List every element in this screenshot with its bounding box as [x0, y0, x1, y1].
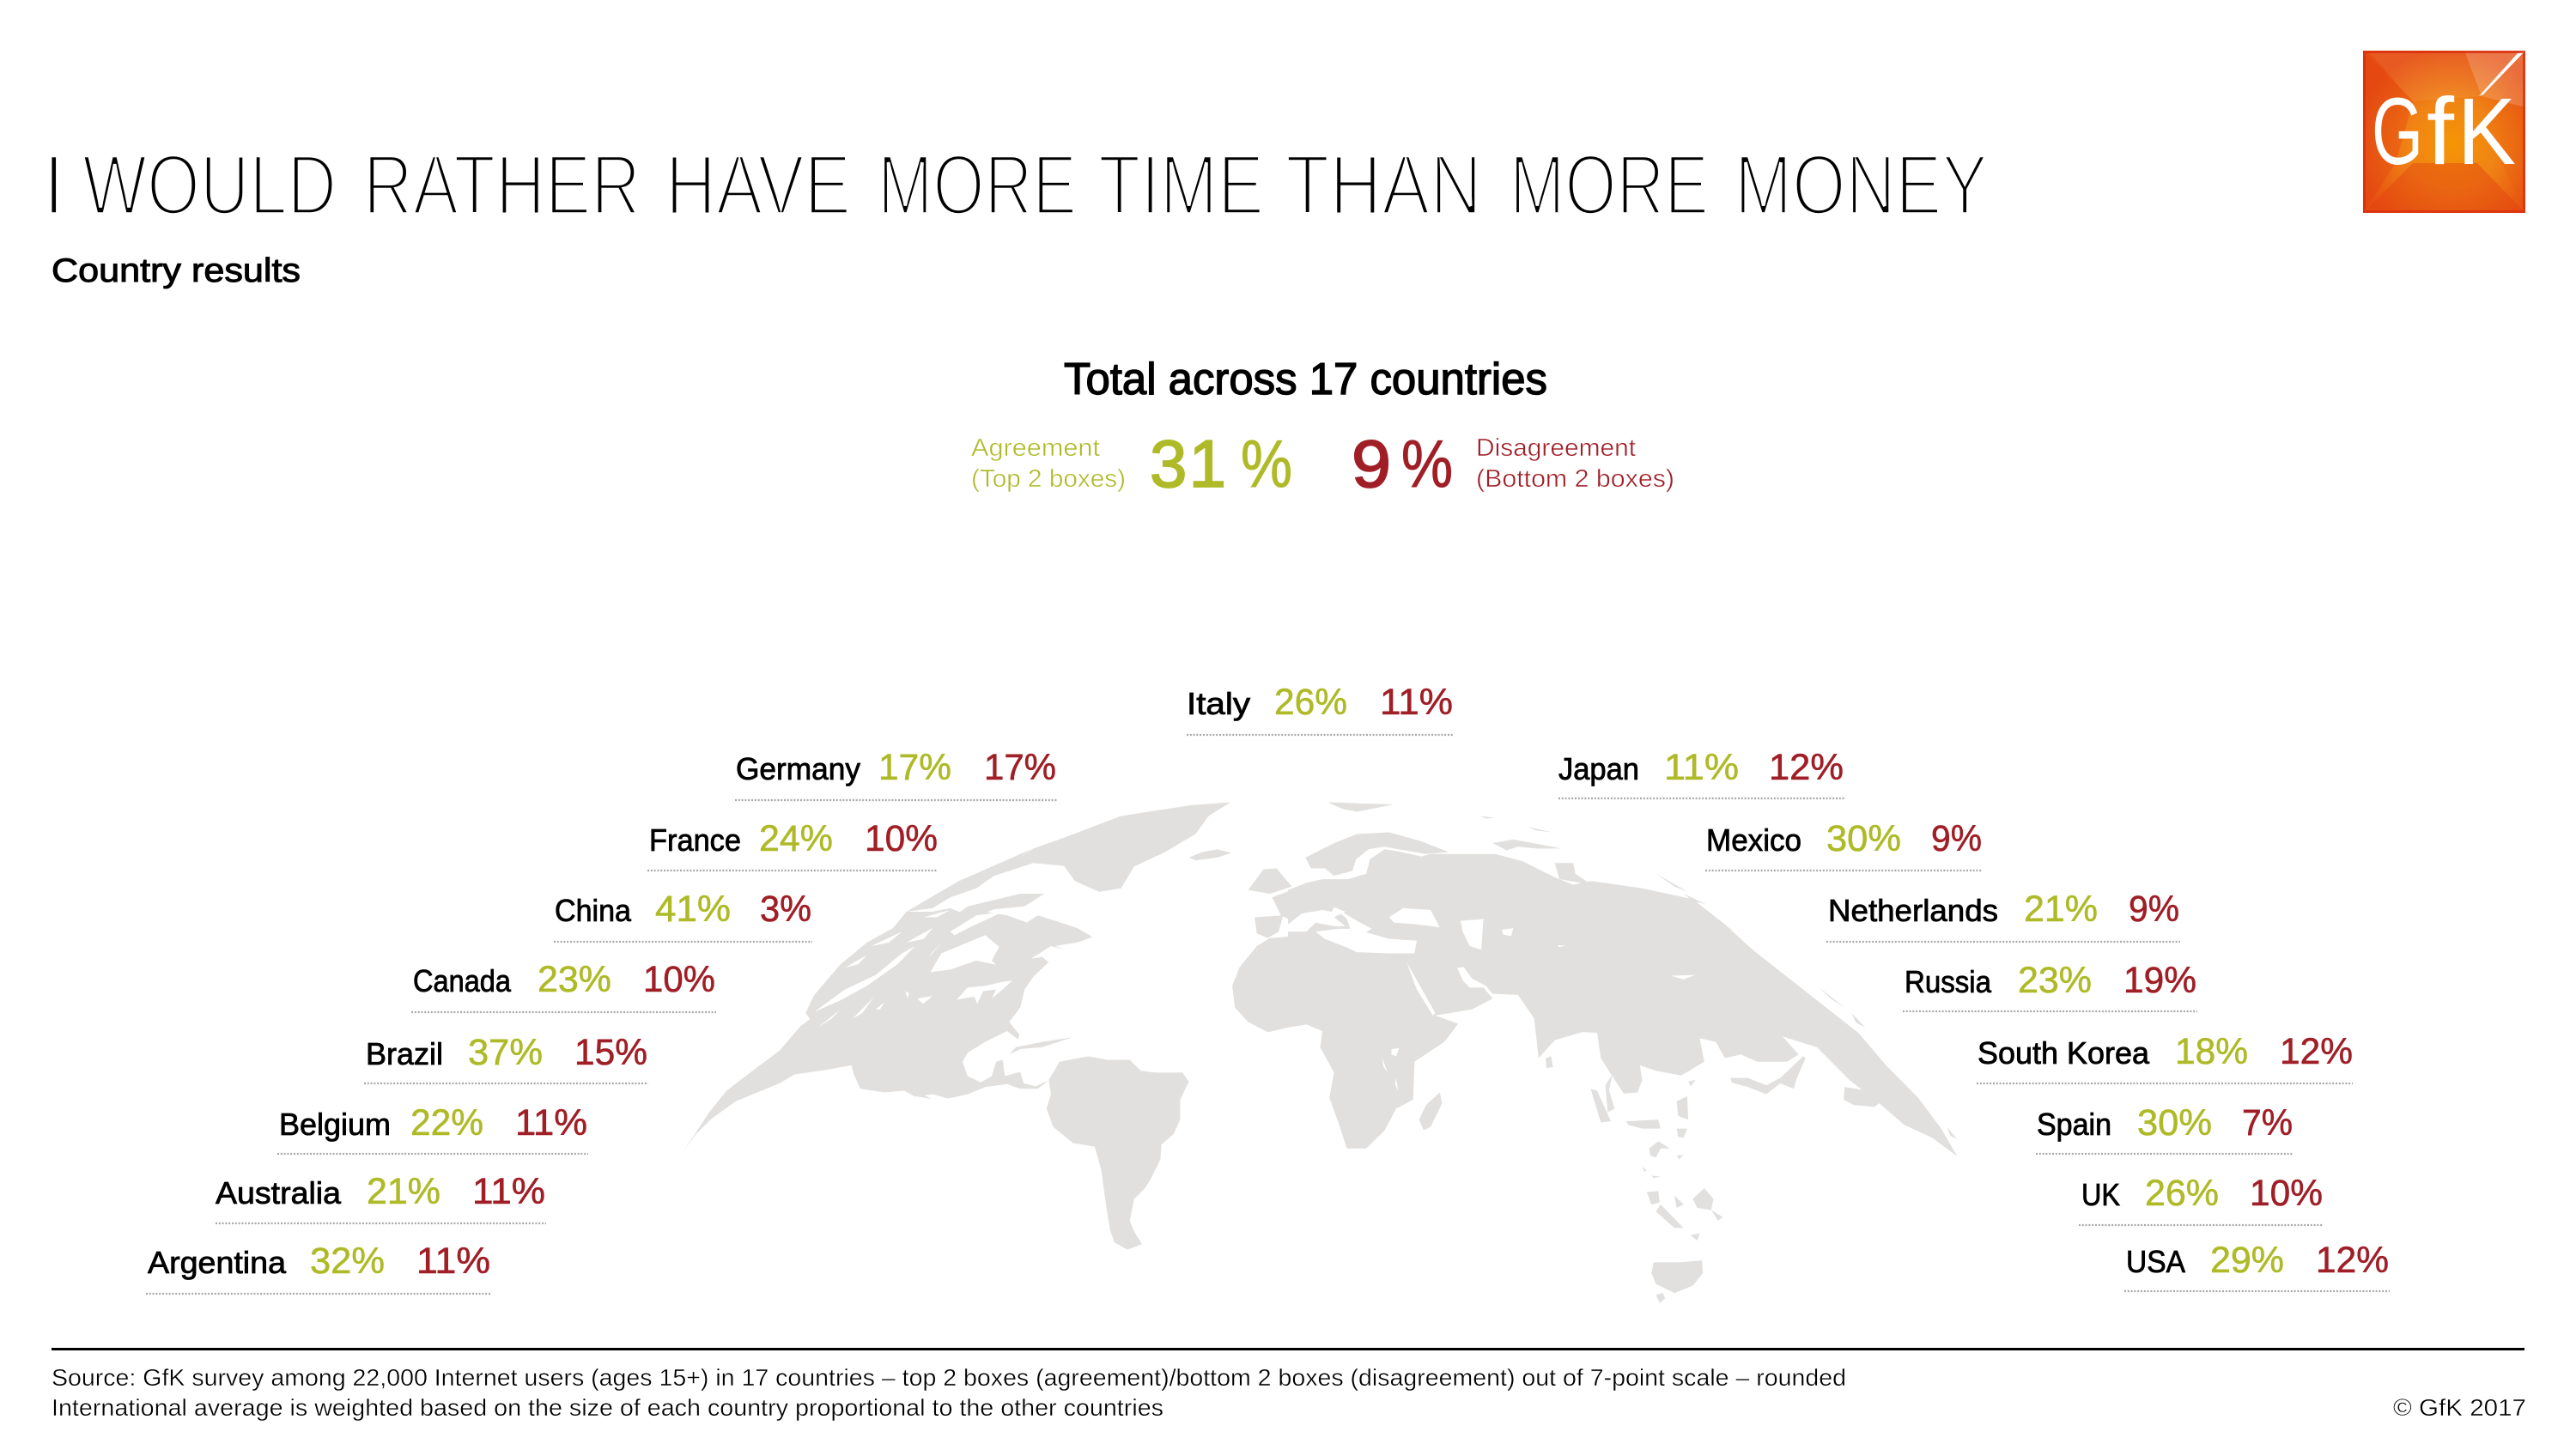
- title: TIME: [1098, 137, 1264, 232]
- row: USA: USA: [2126, 1244, 2185, 1279]
- row: Australia: 21%: [367, 1171, 440, 1212]
- row: Netherlands: 21%: [2024, 889, 2098, 930]
- title: MONEY: [1735, 137, 1988, 232]
- source note: [52, 1364, 1846, 1421]
- row: Russia: Russia: [1905, 964, 1992, 999]
- row: France: 10%: [865, 818, 938, 859]
- row: UK: 10%: [2250, 1173, 2323, 1214]
- row: UK: UK: [2081, 1177, 2120, 1212]
- row: Mexico: [1705, 818, 1983, 871]
- row: Netherlands: [1826, 889, 2180, 942]
- row: Brazil: 37%: [468, 1032, 543, 1073]
- row: UK: 26%: [2145, 1173, 2219, 1214]
- row: Italy: [1187, 682, 1453, 735]
- row: Germany: 17%: [878, 747, 951, 788]
- legend: agreement total: (Top 2 boxes): [971, 465, 1126, 493]
- title: WOULD: [82, 137, 337, 232]
- row: Canada: 10%: [643, 959, 715, 1000]
- world map: [683, 803, 1957, 1303]
- title: HAVE: [665, 137, 851, 232]
- row: Netherlands: 9%: [2129, 889, 2179, 930]
- title: [42, 137, 1988, 232]
- row: Japan: Japan: [1558, 751, 1639, 786]
- row: Brazil: Brazil: [366, 1036, 443, 1071]
- map: North American lakes, bays and arctic channels: [814, 910, 1066, 1028]
- row: Japan: 12%: [1769, 747, 1844, 788]
- row: China: [554, 889, 812, 942]
- legend: agreement total: [971, 426, 1292, 501]
- row: Italy: 26%: [1274, 682, 1347, 723]
- legend: agreement total: Agreement: [971, 434, 1100, 462]
- row: South Korea: [1977, 1031, 2353, 1083]
- row: South Korea: 18%: [2175, 1031, 2248, 1072]
- row: Belgium: 22%: [410, 1102, 483, 1144]
- row: Spain: [2036, 1102, 2293, 1154]
- row: Germany: Germany: [736, 751, 860, 786]
- row: Belgium: 11%: [515, 1102, 587, 1144]
- row: Mexico: 9%: [1931, 818, 1982, 859]
- row: France: [647, 818, 938, 871]
- logo: GfK: K: [2458, 79, 2516, 185]
- row: Brazil: [364, 1032, 648, 1083]
- row: Argentina: 11%: [416, 1241, 490, 1282]
- heading: total across 17 countries: Total across 17 countries: [1064, 355, 1547, 404]
- logo: GfK: [2363, 51, 2525, 213]
- row: USA: 29%: [2210, 1240, 2284, 1281]
- row: Russia: [1903, 960, 2197, 1011]
- row: Russia: 19%: [2123, 960, 2196, 1001]
- legend: disagreement total: Disagreement: [1476, 434, 1636, 462]
- row: Australia: 11%: [472, 1171, 545, 1212]
- row: China: China: [555, 893, 632, 928]
- row: France: France: [649, 822, 741, 858]
- row: Spain: 30%: [2137, 1102, 2212, 1144]
- row: Brazil: 15%: [574, 1032, 647, 1073]
- row: Argentina: [146, 1241, 490, 1294]
- source note: Source: GfK survey among 22,000 Internet users (ages 15+) in 17 countries – top 2 boxes (agreement)/bottom 2 boxes (disagreement) out of 7-point scale – rounded: [52, 1364, 1846, 1391]
- logo: GfK: G: [2372, 79, 2423, 185]
- row: Netherlands: Netherlands: [1828, 893, 1998, 928]
- row: Japan: 11%: [1664, 747, 1739, 788]
- footer rule: [52, 1348, 2524, 1350]
- row: Spain: 7%: [2242, 1102, 2293, 1144]
- title: I: [42, 137, 66, 232]
- row: Canada: [411, 959, 716, 1012]
- row: Japan: [1558, 747, 1844, 798]
- map: Americas, Greenland and west Europe/Africa: [683, 803, 1357, 1250]
- row: Canada: 23%: [538, 959, 611, 1000]
- row: South Korea: 12%: [2280, 1031, 2353, 1072]
- source note: International average is weighted based on the size of each country proportional to the other countries: [52, 1394, 1163, 1421]
- row: Germany: [735, 747, 1057, 800]
- row: Argentina: 32%: [310, 1241, 385, 1282]
- row: South Korea: South Korea: [1978, 1035, 2150, 1071]
- row: Belgium: Belgium: [279, 1107, 391, 1142]
- legend: disagreement total: %: [1401, 426, 1453, 501]
- title: RATHER: [363, 137, 641, 232]
- row: USA: [2124, 1240, 2390, 1291]
- row: Mexico: Mexico: [1706, 822, 1801, 858]
- row: Argentina: Argentina: [148, 1245, 287, 1280]
- legend: disagreement total: 9: [1352, 426, 1391, 501]
- copyright: © GfK 2017: [2393, 1394, 2526, 1421]
- map: inland seas and lakes: [1288, 846, 1695, 1090]
- legend: agreement total: 31: [1150, 426, 1226, 501]
- row: USA: 12%: [2316, 1240, 2389, 1281]
- row: China: 3%: [760, 889, 811, 930]
- row: Germany: 17%: [984, 747, 1056, 788]
- row: France: 24%: [759, 818, 833, 859]
- row: Russia: 23%: [2018, 960, 2092, 1001]
- legend: agreement total: %: [1241, 426, 1292, 501]
- row: UK: [2079, 1173, 2324, 1225]
- row: Australia: [216, 1171, 546, 1223]
- row: China: 41%: [655, 889, 731, 930]
- map: Europe, Africa, Asia and Oceania: [1288, 803, 1957, 1303]
- row: Mexico: 30%: [1826, 818, 1901, 859]
- logo: GfK: f: [2427, 79, 2454, 185]
- row: Italy: Italy: [1187, 686, 1250, 721]
- title: MORE: [878, 137, 1077, 232]
- legend: disagreement total: [1352, 426, 1674, 501]
- subtitle: country results: Country results: [52, 252, 301, 289]
- row: Canada: Canada: [413, 963, 512, 998]
- row: Belgium: [277, 1102, 588, 1154]
- row: Australia: Australia: [216, 1175, 342, 1210]
- row: Italy: 11%: [1380, 682, 1453, 723]
- row: Spain: Spain: [2037, 1107, 2111, 1142]
- title: THAN: [1285, 137, 1482, 232]
- legend: disagreement total: (Bottom 2 boxes): [1476, 465, 1674, 493]
- title: MORE: [1510, 137, 1709, 232]
